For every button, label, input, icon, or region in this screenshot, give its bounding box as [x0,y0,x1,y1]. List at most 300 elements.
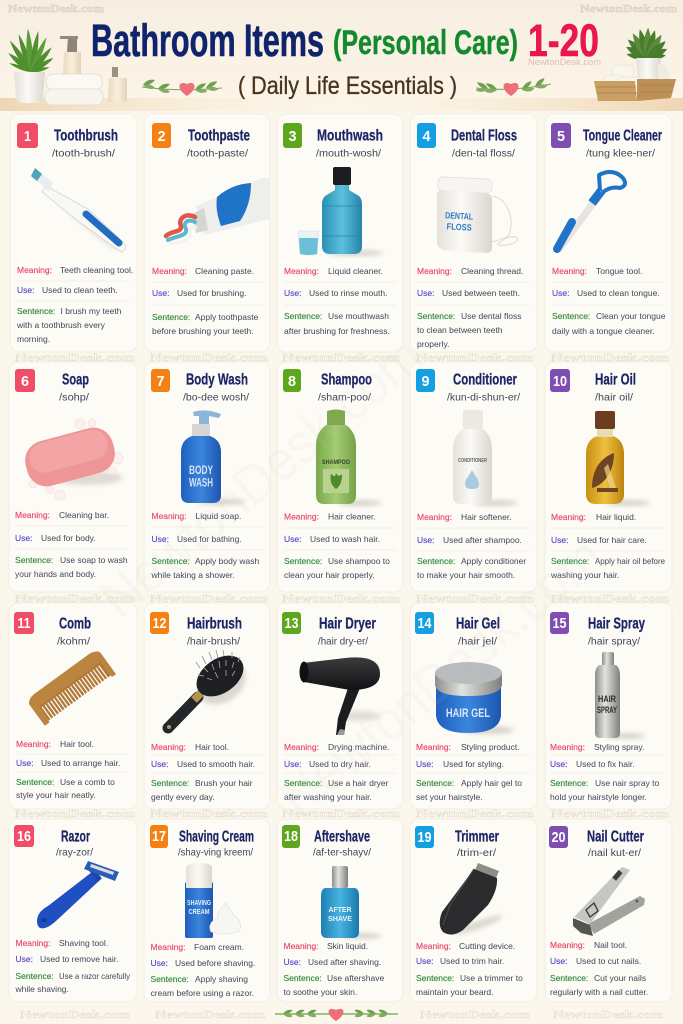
watermark strips between rows [15,352,669,1021]
use row: Used to trim hair. [440,956,504,966]
name and pronunciation: Hair Oil [595,372,636,388]
meaning row [284,941,368,951]
name and pronunciation: /hair dry-er/ [318,636,368,648]
use row: Used after shaving. [308,957,381,967]
meaning row: Meaning: [152,511,186,521]
sentence: Use aftershave [327,973,384,983]
meaning row: Meaning: [550,940,585,950]
use row [550,759,635,769]
use row: Used to cut nails. [576,956,641,966]
card 9: Conditioner [410,362,537,592]
faint diagonal watermarks: NewtonDesk.com [267,524,614,829]
badge 10: 10 [553,373,567,390]
use row: Use: [551,535,568,545]
meaning row [16,739,94,749]
title: Bathroom Items [91,15,324,66]
meaning row: Meaning: [152,266,187,276]
sentence: before brushing your teeth. [152,326,254,336]
name and pronunciation: Nail Cutter [587,828,644,846]
use row: Use: [152,534,169,544]
sentence: Sentence: [150,974,189,984]
meaning row: Cleaning paste. [195,266,254,276]
icon: aftershave bottle [321,866,382,939]
sentence: Apply shaving [195,974,248,984]
meaning row [16,938,108,948]
name and pronunciation: Body Wash [186,372,248,388]
use row: Used after shampoo. [443,535,522,545]
name and pronunciation: Toothbrush [54,128,118,144]
watermark strips between rows: NewtonDesk.com [15,593,135,605]
sentence: Sentence: [416,778,454,788]
watermark strips between rows: NewtonDesk.com [150,808,268,820]
badge 6 [15,369,35,392]
name and pronunciation: Conditioner [453,372,517,388]
badge 20 [549,826,568,848]
icon: shampoo bottle [316,410,382,506]
icon: right laurel heart [476,78,551,96]
sentence: hold your hairstyle longer. [550,792,647,802]
name and pronunciation: Hair Spray [588,616,645,632]
badge 16: 16 [17,828,31,845]
use row: Use: [284,957,301,967]
sentence: Apply toothpaste [195,312,259,322]
name and pronunciation: /kun-di-shun-er/ [447,392,520,404]
name and pronunciation: /af-ter-shayv/ [313,848,371,858]
card 5: Tongue Cleaner [545,114,672,352]
icon: shampoo bottle: SHAMPOO [322,459,350,466]
meaning row [417,266,523,276]
sentence: Use a razor carefully [59,971,131,981]
sentence: Sentence: [417,311,455,321]
sentence [150,974,254,998]
use row: Use: [17,285,34,295]
small watermark under title: NewtonDesk.com [528,57,601,67]
sentence [15,555,128,579]
badge 10 [550,369,570,392]
watermark strips between rows: NewtonDesk.com [150,352,268,364]
sentence [417,311,521,349]
icon: aftershave bottle: AFTER [328,905,352,914]
name and pronunciation: /tung klee-ner/ [586,148,655,160]
sentence: Apply hair gel to [461,778,522,788]
card 13: Hair Dryer [277,603,403,809]
name and pronunciation: Comb [59,616,91,632]
badge 11 [14,612,34,634]
icon: body wash pump bottle: WASH [189,476,213,490]
use row: Use: [417,288,434,298]
sentence: Use soap to wash [60,555,128,565]
meaning row: Meaning: [284,941,318,951]
name and pronunciation [59,372,89,404]
use row: Use: [550,956,567,966]
sentence [284,556,390,580]
meaning row: Meaning: [17,265,52,275]
use row: Use: [152,288,169,298]
name and pronunciation [583,128,662,160]
meaning row: Hair cleaner. [328,512,376,522]
meaning row [152,511,241,521]
sentence [284,778,389,802]
sentence [550,973,648,997]
meaning row: Teeth cleaning tool. [60,265,133,275]
name and pronunciation: Trimmer [455,828,499,846]
use row: Used to rinse mouth. [309,288,387,298]
badge 16 [14,825,34,847]
badge 20: 20 [552,829,566,846]
sentence: maintain your beard. [416,987,494,997]
meaning row: Meaning: [416,941,451,951]
meaning row [551,512,636,522]
sentence: while shaving. [14,984,69,994]
meaning row: Skin liquid. [327,941,368,951]
meaning row [552,266,642,276]
meaning row [416,742,520,752]
name and pronunciation [588,616,645,648]
meaning row: Hair liquid. [596,512,636,522]
sentence: Sentence: [17,306,55,316]
sentence: Use a hair dryer [328,778,389,788]
use row: Use: [151,759,168,769]
card 12: Hairbrush [144,603,270,809]
meaning row [152,266,254,276]
name and pronunciation [455,828,499,859]
meaning row [17,265,133,275]
sentence: after washing your hair. [284,792,372,802]
badge 1 [17,123,38,148]
sentence: cream before using a razor. [150,988,254,998]
icon: wooden comb [26,648,116,726]
sentence: Sentence: [416,973,454,983]
sentence: daily with a tongue cleaner. [552,326,655,336]
faint diagonal watermarks [87,324,614,829]
title: 1-20 [528,15,599,66]
name and pronunciation: Shaving Cream [179,828,254,846]
badge 9: 9 [422,373,430,390]
icon: mouthwash bottle [298,167,383,256]
meaning row [550,742,644,752]
use row: Use: [16,954,33,964]
name and pronunciation: /bo-dee wosh/ [183,392,249,404]
name and pronunciation: Dental Floss [451,128,517,144]
badge 4 [417,123,436,148]
use row: Used for body. [41,533,96,543]
badge 1: 1 [24,128,31,145]
name and pronunciation: Toothpaste [188,128,250,144]
meaning row: Meaning: [284,266,319,276]
watermark strips between rows: NewtonDesk.com [282,808,400,820]
badge 13: 13 [284,615,298,632]
use row: Use: [15,533,32,543]
meaning row: Drying machine. [328,742,389,752]
icon: razor [37,861,119,928]
meaning row: Cutting device. [459,941,515,951]
watermark strips between rows: NewtonDesk.com [282,593,400,605]
sentence [284,311,390,336]
name and pronunciation [318,616,376,648]
card 19: Trimmer [410,819,537,1002]
sentence [284,973,384,997]
use row [416,759,504,769]
badge 15: 15 [552,615,566,632]
name and pronunciation: Hairbrush [187,616,242,632]
icon: hair gel jar [435,662,514,734]
sentence: to soothe your skin. [284,987,357,997]
name and pronunciation: /tooth-brush/ [52,148,115,160]
badge 18 [282,825,300,848]
meaning row [284,512,376,522]
meaning row: Meaning: [284,512,319,522]
sentence [416,973,523,997]
badge 13 [282,612,301,634]
use row: Used to arrange hair. [41,758,120,768]
use row: Used to clean tongue. [577,288,660,298]
use row: Used to clean teeth. [42,285,118,295]
sentence: Apply body wash [195,556,260,566]
use row: Use: [284,534,301,544]
name and pronunciation: /hair jel/ [458,636,497,648]
name and pronunciation: /hair-brush/ [187,636,240,648]
sentence: Apply hair oil before [595,556,665,566]
meaning row: Meaning: [284,742,319,752]
use row: Use: [416,956,433,966]
meaning row: Meaning: [150,942,185,952]
sentence: Sentence: [152,556,190,566]
badge 2 [152,123,171,148]
name and pronunciation [187,128,250,160]
watermark strips between rows: NewtonDesk.com [416,593,534,605]
icon: hair gel jar: HAIR GEL [446,706,490,720]
icon: hair oil bottle [586,411,650,506]
meaning row: Meaning: [15,510,50,520]
sentence: Use a comb to [60,777,115,787]
card 3: Mouthwash [277,114,403,352]
card 10: Hair Oil [545,362,672,592]
card 8: Shampoo [277,362,403,592]
sentence [16,777,115,800]
watermark strips between rows: NewtonDesk.com [553,1009,663,1021]
subtitle: ( Daily Life Essentials ) [238,72,457,100]
meaning row: Liquid soap. [196,511,241,521]
sentence: with a toothbrush every [16,320,106,330]
meaning row: Cleaning bar. [59,510,109,520]
name and pronunciation: Hair Gel [456,616,500,632]
name and pronunciation [57,616,91,648]
icon: beard trimmer [440,863,504,938]
icon: hair dryer [300,657,380,735]
name and pronunciation: Mouthwash [317,128,383,144]
sentence [552,311,666,336]
faint diagonal watermarks: NewtonDesk.com [87,324,434,629]
meaning row [151,742,229,752]
badge 7 [151,369,170,392]
icon: aftershave bottle: SHAVE [328,914,352,923]
meaning row: Meaning: [16,739,51,749]
icon: shaving cream can and foam: SHAVING [187,900,211,907]
use row: Use: [417,535,434,545]
meaning row: Liquid cleaner. [328,266,383,276]
meaning row [550,940,627,950]
card 4: Dental Floss [410,114,537,352]
sentence: Sentence: [551,556,589,566]
badge 3 [283,123,302,148]
meaning row: Nail tool. [594,940,627,950]
meaning row [150,942,244,952]
watermark strips between rows: NewtonDesk.com [416,352,534,364]
badge 7: 7 [156,373,164,390]
watermark: top left: NewtonDesk.com [8,4,105,15]
sentence: Sentence: [284,556,322,566]
sentence [150,556,260,580]
watermark strips between rows: NewtonDesk.com [282,352,400,364]
use row: Used for bathing. [177,534,242,544]
badge 6: 6 [21,373,29,390]
name and pronunciation [451,128,517,160]
sentence: I brush my teeth [60,306,122,316]
name and pronunciation [456,616,500,648]
card 11: Comb [9,603,137,809]
badge 15 [550,612,569,634]
badge 8: 8 [288,373,296,390]
meaning row: Hair softener. [461,512,512,522]
sentence: set your hairstyle. [416,792,483,802]
name and pronunciation: /hair spray/ [588,636,640,648]
meaning row: Meaning: [417,266,452,276]
sentence [151,778,253,802]
badge 2: 2 [158,128,166,145]
meaning row: Meaning: [552,266,587,276]
sentence: your hands and body. [15,569,96,579]
icon: conditioner bottle: CONDITIONER [458,458,487,464]
sentence: Sentence: [16,971,54,981]
sentence: while taking a shower. [150,570,235,580]
meaning row: Cleaning thread. [461,266,523,276]
watermark strips between rows: NewtonDesk.com [416,808,534,820]
icon: shaving cream can and foam: CREAM [188,909,210,916]
icon: left laurel heart [142,80,222,96]
name and pronunciation: Shampoo [321,372,372,388]
meaning row [284,266,383,276]
sentence: clean your hair properly. [284,570,375,580]
use row: Used for styling. [443,759,504,769]
card 17: Shaving Cream [144,819,270,1002]
icon: shaving cream can and foam [185,863,240,938]
icon: body wash pump bottle [181,410,246,505]
watermark strips between rows: NewtonDesk.com [150,593,268,605]
badge 12: 12 [152,615,166,632]
icon: soap bar [21,419,123,500]
card 1: Toothbrush [10,114,137,352]
icon: body wash pump bottle: BODY [189,463,213,477]
sentence: Use shampoo to [328,556,390,566]
sentence: Sentence: [284,778,322,788]
use row [15,533,96,543]
sentence: washing your hair. [550,570,620,580]
badge 19: 19 [418,829,432,846]
icon: conditioner bottle [453,410,518,506]
sentence: regularly with a nail cutter. [550,987,648,997]
sentence: Use a trimmer to [460,973,523,983]
watermark strips between rows: NewtonDesk.com [155,1009,265,1021]
use row: Used to remove hair. [40,954,118,964]
sentence: Sentence: [284,311,322,321]
icon: dental floss box: DENTAL [445,210,474,222]
meaning row: Shaving tool. [59,938,108,948]
card 18: Aftershave [277,819,403,1002]
watermark strips between rows: NewtonDesk.com [15,352,135,364]
icon: dental floss box [437,177,517,253]
name and pronunciation [187,616,242,648]
meaning row [416,941,515,951]
use row: Use: [150,958,168,968]
sentence: Sentence: [550,973,588,983]
sentence: properly. [417,339,449,349]
sentence [152,312,259,336]
meaning row: Meaning: [417,512,452,522]
watermark strips between rows: NewtonDesk.com [15,808,135,820]
badge 12 [150,612,169,634]
meaning row: Hair tool. [60,739,94,749]
sentence: gently every day. [151,792,215,802]
watermark strips between rows: NewtonDesk.com [551,808,669,820]
name and pronunciation: Soap [62,372,89,388]
sentence [550,778,660,802]
decor: left plant and towels [7,28,127,105]
use row: Used to smooth hair. [177,759,255,769]
icon: hairbrush [167,647,254,729]
meaning row [15,510,109,520]
name and pronunciation: /shay-ving kreem/ [178,848,253,858]
sentence: Sentence: [552,311,590,321]
decor: right plant and basket [594,27,676,101]
sentence: morning. [17,334,50,344]
sentence: Use mouthwash [328,311,389,321]
name and pronunciation [447,372,520,404]
sentence: to clean between teeth [417,325,503,335]
icon: hair spray can: HAIR [598,694,616,704]
sentence: Sentence: [152,312,190,322]
badge 17 [150,825,168,848]
name and pronunciation [313,828,371,858]
icon: nail cutter [573,867,645,936]
meaning row: Meaning: [151,742,186,752]
sentence: style your hair neatly. [16,790,96,800]
watermark strips between rows: NewtonDesk.com [420,1009,530,1021]
meaning row: Tongue tool. [596,266,642,276]
meaning row [417,512,512,522]
use row: Used for brushing. [177,288,246,298]
header banner [0,0,683,113]
meaning row: Meaning: [551,512,586,522]
name and pronunciation: /sohp/ [59,392,89,404]
name and pronunciation: /den-tal floss/ [452,148,515,160]
watermark strips between rows: NewtonDesk.com [20,1009,130,1021]
use row: Used for hair care. [577,535,647,545]
meaning row: Meaning: [550,742,585,752]
card 2: Toothpaste [144,114,270,352]
card 16: Razor [9,819,137,1002]
use row: Used to fix hair. [576,759,635,769]
name and pronunciation: /nail kut-er/ [588,848,641,859]
icon: dental floss box: FLOSS [446,221,472,233]
meaning row: Foam cream. [194,942,244,952]
card 20: Nail Cutter [545,819,672,1002]
sentence: Use dental floss [461,311,521,321]
watermark strips between rows: NewtonDesk.com [551,593,669,605]
watermark: top right: NewtonDesk.com [580,4,678,15]
name and pronunciation: /trim-er/ [457,848,496,859]
sentence [14,971,131,994]
badge 5: 5 [557,128,565,145]
